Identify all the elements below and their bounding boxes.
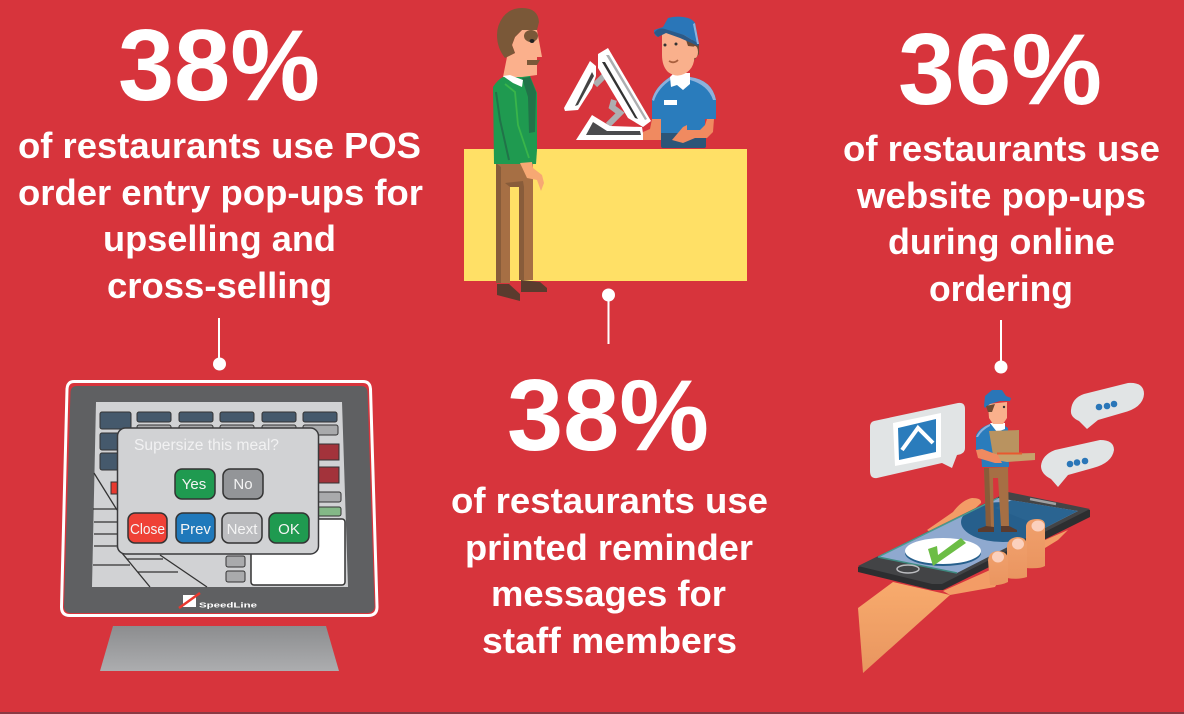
button: OK: OK [278, 521, 300, 538]
stat: 38% printed reminder messages [451, 360, 768, 661]
text: POS pop-ups description: upselling and [103, 218, 336, 259]
delivery person with pizza [976, 390, 1035, 532]
text: printed reminder description: staff members [482, 620, 737, 661]
number: 38% center: 38% [507, 360, 709, 472]
text: printed reminder description: messages for [491, 573, 726, 614]
text: POS pop-ups description: cross-selling [107, 265, 332, 306]
button: Prev: Prev [180, 521, 211, 538]
number: 38% left: 38% [118, 10, 320, 122]
button: Yes [175, 469, 215, 499]
button: Close: Close [130, 521, 165, 538]
text: website pop-ups description: of restaurants use [843, 128, 1160, 169]
button: Next [222, 513, 262, 543]
pop-up dialog [118, 428, 318, 554]
text: POS pop-ups description: order entry pop-ups for [18, 172, 423, 213]
icon: POS terminal with pop-up [62, 382, 377, 671]
terminal outline [62, 382, 377, 616]
SpeedLine logo [179, 593, 257, 610]
connector: left [213, 318, 226, 370]
text: printed reminder description: printed reminder [465, 527, 753, 568]
text: POS pop-ups description: of restaurants use POS [18, 125, 421, 166]
SpeedLine logo: SpeedLine [199, 602, 257, 610]
stat: 36% website pop-ups [843, 14, 1160, 309]
speech bubble: dots top [1071, 383, 1144, 429]
number: 36%: 36% [898, 14, 1102, 126]
connector: right [994, 320, 1008, 374]
smartphone [858, 492, 1090, 590]
terminal stand [100, 626, 339, 671]
hand [858, 498, 1068, 673]
button: No: No [233, 476, 253, 493]
cashier [643, 17, 716, 148]
button: Yes: Yes [182, 476, 206, 493]
text: website pop-ups description: during online [888, 221, 1115, 262]
terminal bezel [64, 386, 374, 613]
button: Prev [176, 513, 215, 543]
speech bubble: dots lower [1041, 440, 1114, 487]
text: printed reminder description: of restaurants use [451, 480, 768, 521]
terminal screen [92, 402, 348, 587]
speech bubble with logo [870, 403, 965, 478]
stat: 38% POS order entry pop-ups [18, 10, 423, 306]
fingers [988, 519, 1045, 585]
button: Close [128, 513, 167, 543]
POS terminal on counter [564, 48, 651, 140]
text: website pop-ups description: website pop-ups [856, 175, 1146, 216]
text: printed reminder description [451, 480, 768, 661]
illustration: delivery on smartphone [858, 383, 1144, 673]
connector: center [602, 288, 615, 344]
button: OK [269, 513, 309, 543]
button: No [223, 469, 263, 499]
dialog question: Supersize this meal? [134, 437, 279, 454]
text: website pop-ups description: ordering [929, 268, 1073, 309]
text: website pop-ups description [843, 128, 1160, 309]
customer [493, 8, 547, 301]
button: Next: Next [227, 521, 258, 538]
illustration: counter scene [464, 8, 747, 301]
text: POS pop-ups description [18, 125, 423, 306]
counter [464, 149, 747, 281]
